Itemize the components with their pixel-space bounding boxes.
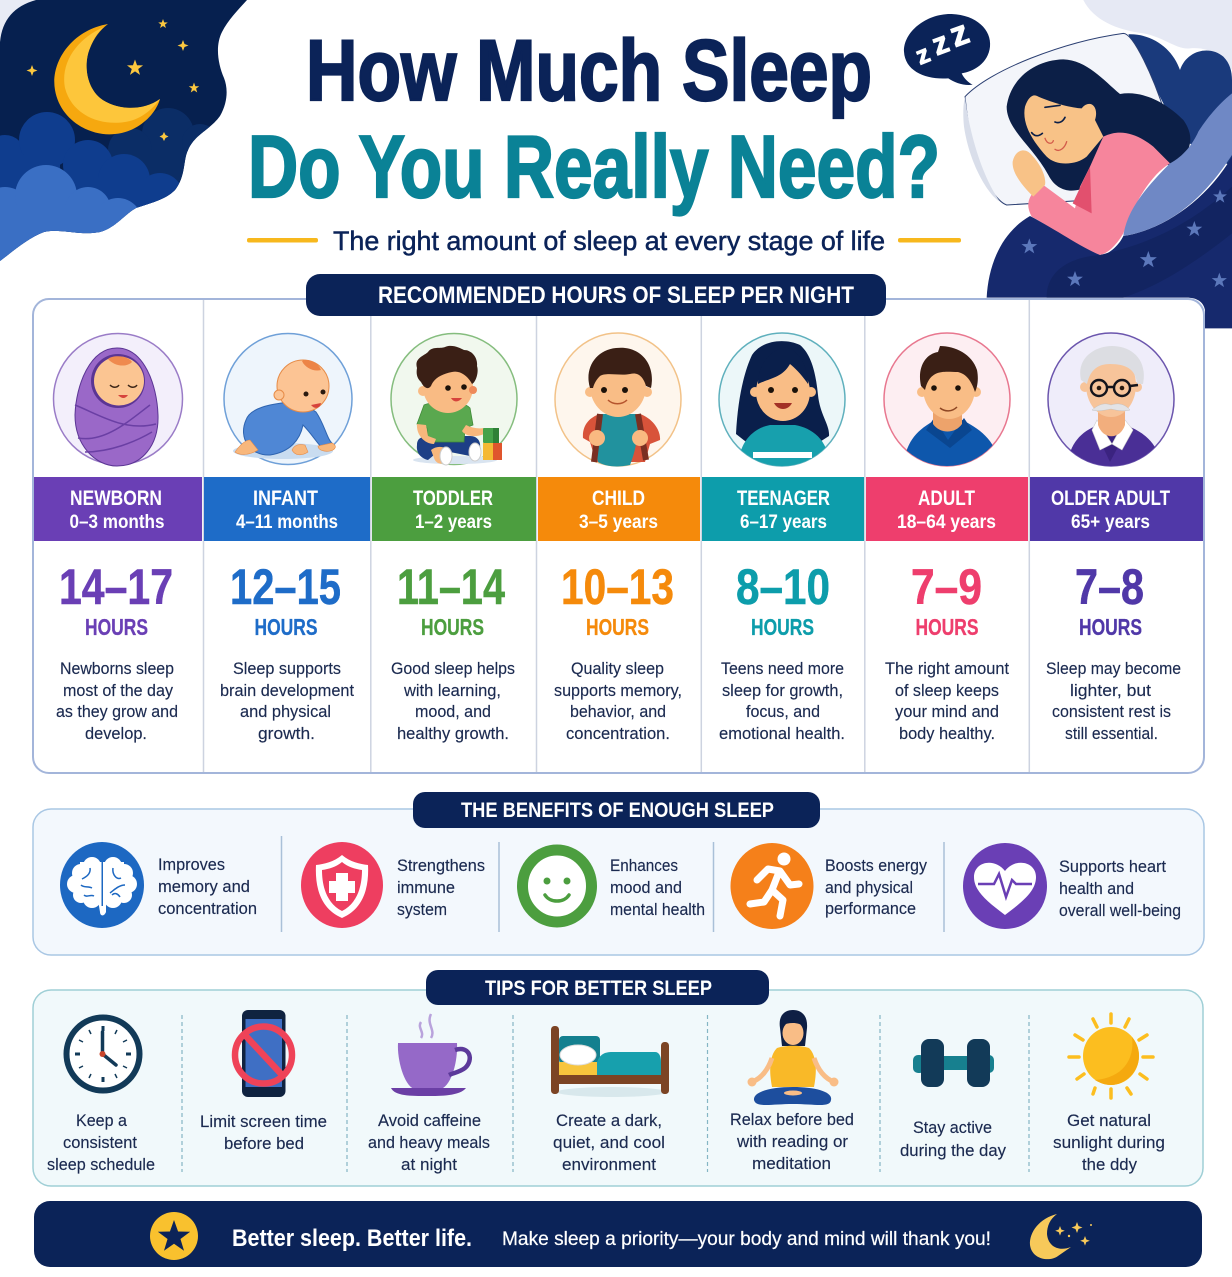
text: heart: Supports heart [1059, 857, 1166, 876]
text: toddler: Good sleep helps [391, 659, 515, 678]
column: older adult [1030, 333, 1203, 743]
text: energy [825, 856, 927, 918]
hours: newborn: 14–17 [59, 559, 173, 615]
title: How Much Sleep [306, 23, 872, 119]
text: adult [885, 659, 1009, 743]
cloud: front light blue cloud [0, 165, 142, 265]
text: adult: your mind and [895, 702, 999, 721]
banner: older adult [1030, 477, 1203, 541]
banner: teenager [702, 477, 864, 541]
text: immune: system [397, 900, 447, 919]
face [1024, 95, 1103, 164]
portrait: newborn [54, 334, 182, 466]
banner: adult: ADULT [918, 487, 975, 510]
banner: infant: 4–11 months [236, 512, 338, 533]
banner: infant [204, 477, 370, 541]
hours: older adult: HOURS [1079, 614, 1142, 640]
text: toddler: with learning, [403, 681, 501, 700]
text: mood: Enhances [610, 856, 678, 875]
banner: adult: 18–64 years [897, 512, 996, 533]
banner: child: CHILD [592, 487, 645, 510]
text: caffeine: and heavy meals [368, 1133, 490, 1152]
footer banner [34, 1201, 1202, 1267]
text: teenager: emotional health. [719, 724, 845, 743]
banner: child [538, 477, 700, 541]
text: toddler: mood, and [415, 702, 491, 721]
column: teenager [702, 333, 864, 743]
slogan: Better sleep. Better life. [232, 1225, 472, 1252]
text: older adult: lighter, but [1070, 681, 1151, 700]
tip: screen time [200, 1010, 327, 1153]
tip: environment [551, 1026, 669, 1174]
pillow [965, 33, 1165, 205]
sheet fold [1123, 93, 1232, 236]
portrait: infant [224, 334, 352, 464]
portrait: adult [884, 333, 1010, 470]
text: active: during the day [900, 1141, 1006, 1160]
text: newborn [56, 659, 178, 743]
tip: active [900, 1039, 1006, 1160]
text: adult: The right amount [885, 659, 1009, 678]
text: immune: Strengthens [397, 856, 485, 875]
hours: child: 10–13 [561, 559, 674, 615]
text: caffeine [368, 1111, 490, 1174]
text: active [900, 1118, 1006, 1160]
text: teenager: Teens need more [721, 659, 844, 678]
heading: benefits: THE BENEFITS OF ENOUGH SLEEP [461, 799, 774, 822]
hours: child [561, 559, 674, 640]
hours: teenager: HOURS [751, 614, 814, 640]
text: memory [158, 855, 257, 918]
bed headboard [1128, 34, 1232, 167]
benefit: memory [60, 842, 257, 928]
text: environment: environment [562, 1155, 656, 1174]
text: caffeine: at night [401, 1155, 457, 1174]
text: infant: Sleep supports [233, 659, 341, 678]
banner: teenager: TEENAGER [737, 487, 830, 510]
hours: infant: 12–15 [230, 559, 341, 615]
text: schedule [47, 1111, 155, 1174]
icon: runner [730, 843, 814, 929]
stars [26, 19, 199, 141]
hours: adult [911, 559, 982, 640]
icon: crescent moon [54, 24, 160, 134]
text: environment: Create a dark, [556, 1111, 662, 1130]
banner: adult [866, 477, 1028, 541]
text: toddler: healthy growth. [397, 724, 509, 743]
text: energy: Boosts energy [825, 856, 927, 875]
portrait: teenager [719, 333, 845, 470]
text: environment [553, 1111, 665, 1174]
banner: teenager: 6–17 years [740, 512, 827, 533]
banner: older adult: 65+ years [1071, 512, 1150, 533]
panel: tips [33, 970, 1203, 1186]
text: sunlight: sunlight during [1053, 1133, 1165, 1152]
blanket [987, 157, 1232, 328]
portrait: toddler [391, 334, 517, 465]
text: memory: Improves [158, 855, 225, 874]
text: infant: growth. [258, 724, 315, 743]
text: newborn: develop. [85, 724, 147, 743]
benefit: energy [730, 843, 927, 929]
portrait: child [555, 333, 681, 466]
hours: newborn: HOURS [85, 614, 148, 640]
text: teenager: sleep for growth, [722, 681, 843, 700]
text: environment: quiet, and cool [553, 1133, 665, 1152]
text: child [554, 659, 682, 743]
panel: benefits [33, 792, 1204, 955]
hours: older adult: 7–8 [1075, 559, 1144, 615]
hours: toddler: HOURS [421, 614, 484, 640]
text: screen time: before bed [224, 1134, 304, 1153]
text: sunlight: the ddy [1082, 1155, 1137, 1174]
hours: adult: 7–9 [911, 559, 982, 615]
text: relax [730, 1110, 854, 1173]
text: heart [1059, 857, 1181, 920]
icon: brain [60, 842, 144, 928]
text: memory: concentration [158, 899, 257, 918]
hours: older adult [1075, 559, 1144, 640]
text: memory: memory and [158, 877, 250, 896]
icon: star badge [150, 1212, 198, 1260]
text: energy: performance [825, 899, 916, 918]
text: child: supports memory, [554, 681, 682, 700]
text: screen time: Limit screen time [200, 1112, 327, 1131]
icon: clock [66, 1018, 140, 1090]
text: relax: meditation [752, 1154, 831, 1173]
hours: infant: HOURS [254, 614, 318, 640]
icon: phone crossed out [235, 1010, 292, 1097]
column: infant [204, 334, 370, 743]
text: sunlight: Get natural [1067, 1111, 1151, 1130]
speech bubble with zzz [904, 13, 990, 85]
text: schedule: sleep schedule [47, 1155, 155, 1174]
text: mood: mental health [610, 900, 705, 919]
text: mood: mood and [610, 878, 682, 897]
text: teenager: focus, and [746, 702, 820, 721]
text: newborn: as they grow and [56, 702, 178, 721]
icon: sun [1069, 1014, 1153, 1098]
hours: teenager [736, 559, 830, 640]
text: adult: of sleep keeps [895, 681, 999, 700]
text: infant [220, 659, 354, 743]
tip: relax [730, 1010, 854, 1173]
text: child: concentration. [566, 724, 670, 743]
message: Make sleep a priority—your body and mind will thank you! [502, 1229, 991, 1250]
icon: bed [551, 1026, 669, 1097]
praying hands [1013, 150, 1045, 197]
text: infant: and physical [240, 702, 331, 721]
icon: smiling face [522, 850, 592, 922]
subtitle: The right amount of sleep at every stage of life [333, 226, 885, 256]
hours: adult: HOURS [916, 614, 978, 640]
hours: toddler: 11–14 [397, 559, 505, 615]
text: sunlight [1053, 1111, 1165, 1174]
text: immune [397, 856, 485, 919]
speech bubble with zzz: z [945, 13, 974, 55]
benefit: heart [963, 843, 1181, 929]
icon: heart with pulse [963, 843, 1047, 929]
speech bubble with zzz: z [927, 25, 953, 62]
benefit: immune [301, 842, 485, 928]
cloud: middle blue cloud [0, 112, 183, 265]
icon: person meditating [748, 1010, 838, 1105]
text: adult: body healthy. [899, 724, 995, 743]
pink sweater [1028, 133, 1170, 255]
title [248, 23, 940, 216]
banner: toddler: 1–2 years [415, 512, 492, 533]
text: child: behavior, and [570, 702, 666, 721]
banner: newborn [34, 477, 202, 541]
icon: shield [301, 842, 383, 928]
text: schedule: consistent [63, 1133, 137, 1152]
text: relax: Relax before bed [730, 1110, 854, 1129]
speech bubble with zzz: z [912, 40, 934, 71]
hours: infant [230, 559, 341, 640]
panel: recommended hours [33, 274, 1204, 773]
hair [1007, 59, 1190, 191]
text: newborn: most of the day [63, 681, 173, 700]
text: older adult: Sleep may become [1046, 659, 1181, 678]
heading: tips: TIPS FOR BETTER SLEEP [485, 977, 712, 1000]
text: energy: and physical [825, 878, 913, 897]
text: heart: overall well-being [1059, 901, 1181, 920]
text: older adult: consistent rest is [1052, 702, 1171, 721]
banner: newborn: NEWBORN [70, 487, 162, 510]
text: child: Quality sleep [571, 659, 664, 678]
banner: toddler: TODDLER [413, 487, 493, 510]
benefit: mood [522, 850, 705, 922]
column: toddler [372, 334, 536, 743]
illustration: night sky with moon and clouds [0, 0, 247, 265]
tip: schedule [47, 1018, 155, 1174]
banner: toddler [372, 477, 536, 541]
heading: benefits [413, 792, 820, 828]
text: infant: brain development [220, 681, 354, 700]
tip: sunlight [1053, 1014, 1165, 1174]
text: teenager [719, 659, 845, 743]
icon: dumbbell [913, 1039, 994, 1087]
text: immune: immune [397, 878, 455, 897]
text: heart: health and [1059, 879, 1134, 898]
cloud: far dark cloud [108, 108, 218, 210]
text: older adult [1046, 659, 1181, 743]
banner: older adult: OLDER ADULT [1051, 487, 1170, 510]
hours: teenager: 8–10 [736, 559, 830, 615]
column: child [538, 333, 700, 743]
text: relax: with reading or [736, 1132, 848, 1151]
heading: recommended hours [306, 274, 886, 316]
illustration: woman sleeping [904, 0, 1232, 328]
banner: infant: INFANT [253, 487, 318, 510]
icon: coffee cup [391, 1014, 470, 1096]
text: mood [610, 856, 705, 919]
text: toddler [391, 659, 515, 743]
hours: child: HOURS [586, 614, 649, 640]
text: newborn: Newborns sleep [60, 659, 174, 678]
title: Do You Really Need? [248, 117, 940, 216]
blanket stars [1021, 189, 1227, 287]
text: active: Stay active [913, 1118, 992, 1137]
banner: child: 3–5 years [579, 512, 658, 533]
text: screen time [200, 1112, 327, 1153]
column: newborn [34, 334, 202, 743]
heading: tips [426, 970, 769, 1005]
portrait: older adult [1048, 333, 1174, 470]
tip: caffeine [368, 1014, 490, 1174]
hours: newborn [59, 559, 173, 640]
banner: newborn: 0–3 months [70, 512, 164, 533]
column: adult [866, 333, 1028, 743]
hours: toddler [397, 559, 505, 640]
text: schedule: Keep a [76, 1111, 128, 1130]
text: caffeine: Avoid caffeine [378, 1111, 481, 1130]
icon: moon and stars [1030, 1214, 1092, 1259]
heading: recommended hours: RECOMMENDED HOURS OF SLEEP PER NIGHT [378, 282, 854, 309]
text: older adult: still essential. [1065, 724, 1158, 743]
